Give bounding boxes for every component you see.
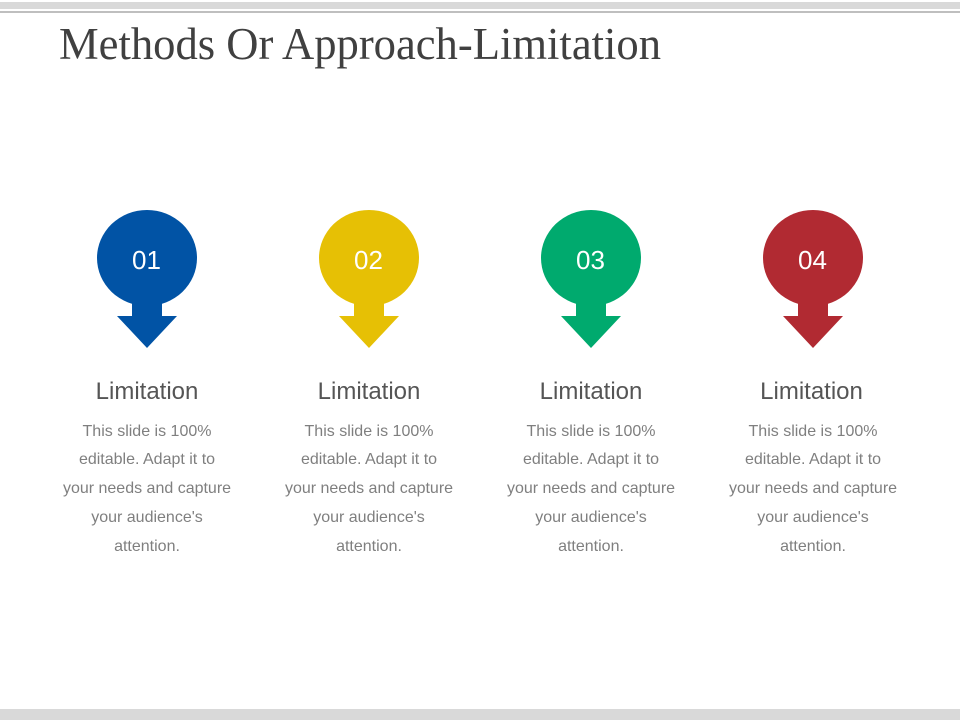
text block: editable. Adapt it to — [523, 451, 659, 468]
icon: blue pin arrow 01 — [97, 210, 197, 348]
icon: green pin arrow 03: 03 — [576, 245, 605, 275]
text block: your audience's — [91, 509, 203, 526]
panel: limitation 01 — [63, 210, 231, 555]
panel: limitation 02 — [285, 210, 453, 555]
text block: attention. — [114, 538, 180, 555]
text block: your needs and capture — [285, 480, 453, 497]
text block — [285, 422, 453, 555]
text block: editable. Adapt it to — [79, 451, 215, 468]
text block: your audience's — [757, 509, 869, 526]
text block: editable. Adapt it to — [301, 451, 437, 468]
icon: yellow pin arrow 02 — [319, 210, 419, 348]
text block: This slide is 100% — [749, 422, 877, 440]
heading: Limitation — [96, 378, 198, 405]
text block — [63, 422, 231, 555]
text block — [507, 422, 675, 555]
icon: red pin arrow 04 — [763, 210, 863, 348]
text block: This slide is 100% — [527, 422, 655, 440]
text block: your needs and capture — [729, 480, 897, 497]
text block: your audience's — [535, 509, 647, 526]
top band — [0, 2, 960, 9]
text block: editable. Adapt it to — [745, 451, 881, 468]
bottom band — [0, 709, 960, 720]
heading: Limitation — [318, 378, 420, 405]
text block: your needs and capture — [63, 480, 231, 497]
panel: limitation 03 — [507, 210, 675, 555]
text block: your needs and capture — [507, 480, 675, 497]
text block: attention. — [558, 538, 624, 555]
panel: limitation 04 — [729, 210, 897, 555]
text block: This slide is 100% — [305, 422, 433, 440]
top rule — [0, 11, 960, 13]
title: Methods Or Approach-Limitation — [59, 19, 661, 69]
icon: red pin arrow 04: 04 — [798, 245, 827, 275]
text block — [729, 422, 897, 555]
text block: This slide is 100% — [83, 422, 211, 440]
icon: green pin arrow 03 — [541, 210, 641, 348]
text block: your audience's — [313, 509, 425, 526]
icon: yellow pin arrow 02: 02 — [354, 245, 383, 275]
text block: attention. — [336, 538, 402, 555]
icon: blue pin arrow 01: 01 — [132, 245, 161, 275]
heading: Limitation — [760, 378, 863, 405]
text block: attention. — [780, 538, 846, 555]
heading: Limitation — [540, 378, 642, 405]
